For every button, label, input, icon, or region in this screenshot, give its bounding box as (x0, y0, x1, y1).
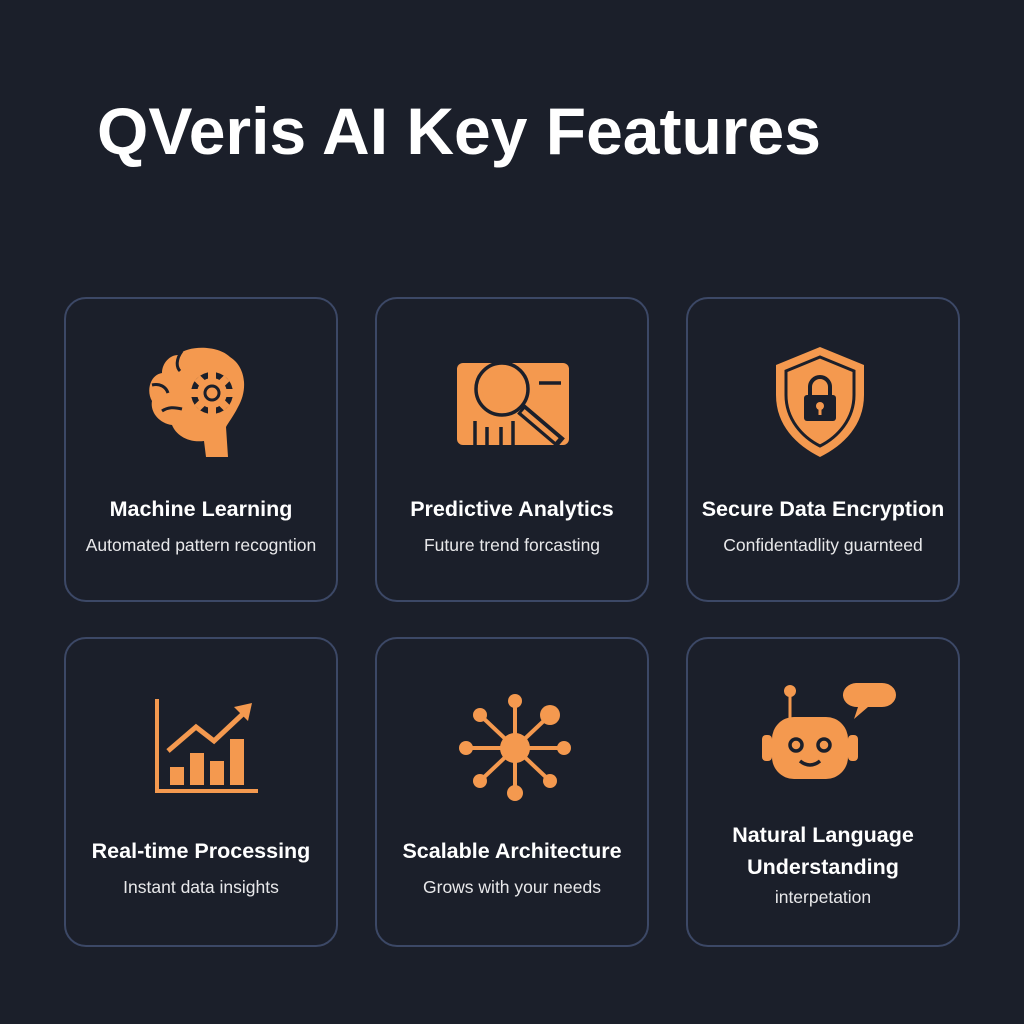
panel: NLU (686, 637, 960, 947)
text: NLU title (732, 823, 914, 879)
panel: secure encryption (686, 297, 960, 602)
text: NLU title: Natural Language (732, 823, 914, 847)
text: NLU title: Understanding (747, 855, 899, 879)
icon: robot chat (762, 683, 896, 779)
text: SA title: Scalable Architecture (402, 839, 622, 863)
panel: predictive analytics (375, 297, 649, 602)
panel: machine learning (64, 297, 338, 602)
text: RT title: Real-time Processing (92, 839, 310, 863)
icon: shield lock (776, 347, 864, 457)
text: PA sub: Future trend forcasting (424, 535, 600, 555)
icon: network (459, 694, 571, 801)
icon: magnifier chart (457, 363, 569, 445)
title: QVeris AI Key Features (97, 94, 821, 168)
text: SA sub: Grows with your needs (423, 877, 601, 897)
text: ML sub: Automated pattern recogntion (86, 535, 316, 555)
text: SDE title: Secure Data Encryption (702, 497, 944, 521)
icon: bar chart trend (155, 699, 258, 793)
text: PA title: Predictive Analytics (410, 497, 614, 521)
panel: real-time (64, 637, 338, 947)
text: SDE sub: Confidentadlity guarnteed (723, 535, 923, 555)
icon: brain gear (149, 348, 244, 457)
text: ML title: Machine Learning (110, 497, 292, 521)
panel: scalable (375, 637, 649, 947)
text: NLU sub: interpetation (775, 887, 871, 907)
text: RT sub: Instant data insights (123, 877, 279, 897)
